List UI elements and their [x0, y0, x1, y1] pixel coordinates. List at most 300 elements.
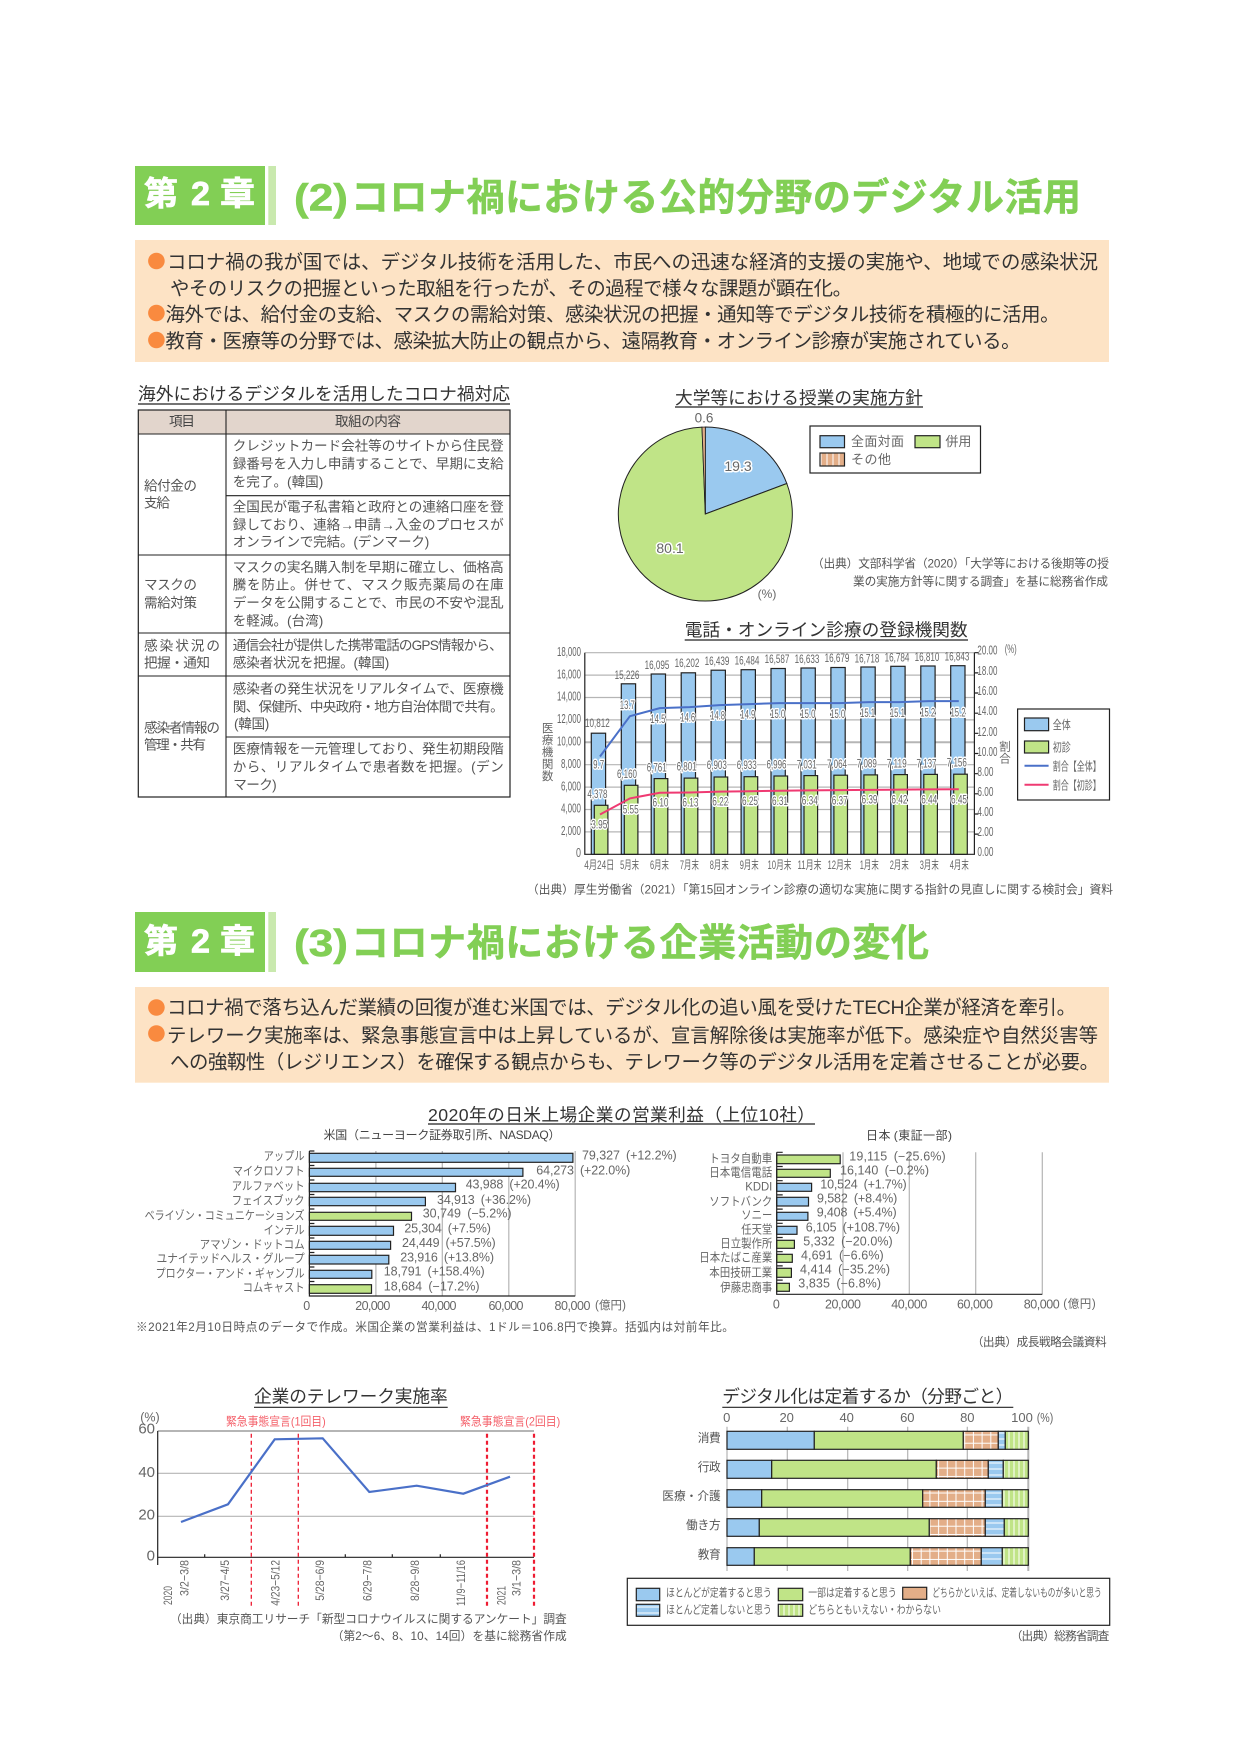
combo chart legend: 割合【初診】 [1053, 778, 1101, 793]
first-visit share labels: 6.31 [772, 794, 788, 808]
row: administration [698, 1460, 1028, 1478]
first-visit value labels [587, 756, 967, 801]
bar chart: Japan companies: 日本 (東証一部) [866, 1129, 952, 1143]
stacked chart axis labels: 0 [723, 1410, 730, 1425]
left axis labels: 14,000 [557, 688, 581, 704]
first-visit share labels: 6.37 [832, 793, 848, 807]
table: overseas digital responses: 関、保健所、中央政府・地方自治体間で共有。 [233, 700, 504, 714]
stacked chart legend: ほとんど定着しないと思う [666, 1603, 772, 1617]
telework x labels: 3/27−4/5 [218, 1560, 232, 1601]
month labels: 12月末 [828, 858, 852, 872]
table: overseas digital responses: マスクの [144, 578, 197, 592]
section header: (2) public sector digital use: (2) [294, 178, 348, 220]
stacked chart legend: 一部は定着すると思う [808, 1585, 897, 1599]
US value labels: 34,913 (+36.2%) [437, 1193, 531, 1207]
table: overseas digital responses: 録番号を入力し申請することで、早期に支給 [233, 456, 504, 472]
Japan value labels: 4,691 (−6.6%) [801, 1249, 884, 1263]
US grid and axes [376, 1151, 575, 1296]
US axis labels: 80,000 [554, 1299, 591, 1313]
Japan company names: トヨタ自動車 [709, 1151, 772, 1165]
total share labels: 15.1 [890, 706, 905, 720]
US value labels [384, 1149, 677, 1294]
month labels: 2月末 [890, 858, 909, 872]
left axis labels: 16,000 [557, 666, 581, 682]
pie chart: class policy: 80.1 [656, 540, 684, 556]
bar chart: Japan companies [699, 1129, 1096, 1311]
US value labels: 24,449 (+57.5%) [402, 1236, 496, 1250]
table title: 海外におけるデジタルを活用したコロナ禍対応 [138, 384, 510, 404]
left axis labels: 4,000 [561, 800, 581, 816]
Japan company names: ソフトバンク [709, 1194, 772, 1208]
Japan company names: ソニー [741, 1208, 772, 1222]
total value labels: 16,633 [795, 652, 820, 666]
first-visit value labels: 7,137 [916, 756, 937, 770]
stacked chart axis labels: 40 [839, 1410, 854, 1425]
Japan axis labels: 80,000 [1024, 1297, 1060, 1311]
summary panel: public sector: 教育・医療等の分野では、感染拡大防止の観点から、遠隔教育・オンライン診療が実施されている。 [166, 331, 1020, 353]
month labels: 10月末 [768, 858, 792, 872]
telework x labels: 3/2−3/8 [177, 1560, 191, 1596]
Japan axis labels: 0 [773, 1297, 780, 1311]
first-visit value labels: 7,156 [947, 756, 967, 770]
US company names: コムキャスト [243, 1281, 305, 1295]
total value labels: 16,679 [825, 651, 850, 665]
pie chart: class policy [618, 410, 792, 601]
section header: (2) public sector digital use: 第 [144, 175, 178, 212]
total value labels: 16,784 [885, 651, 910, 665]
combo chart source note: （出典）厚生労働省（2021）「第15回オンライン診療の適切な実施に関する指針の見直しに関する検討会」資料 [527, 882, 1113, 896]
table: overseas digital responses: 取組の内容 [335, 413, 401, 429]
first-visit value labels: 7,064 [827, 757, 847, 771]
Japan bars [777, 1155, 840, 1291]
total bars [591, 666, 965, 854]
left axis labels: 2,000 [561, 823, 581, 838]
right axis labels: 16.00 [977, 683, 997, 698]
table: overseas digital responses: を完了。(韓国) [233, 474, 323, 490]
US value labels: 25,304 (+7.5%) [404, 1222, 491, 1236]
summary panel: public sector: 海外では、給付金の支給、マスクの需給対策、感染状況の把握・通知等でデジタル技術を積極的に活用。 [166, 304, 1060, 326]
Japan value labels: 10,524 (+1.7%) [820, 1177, 907, 1191]
US company names [145, 1149, 305, 1295]
US company names: ユナイテッドヘルス・グループ [157, 1251, 305, 1265]
month labels [584, 858, 969, 872]
grid and axes [585, 653, 978, 854]
pie chart: class policy: 19.3 [724, 458, 752, 474]
table: overseas digital responses: 感染状況の [144, 638, 220, 654]
telework x labels [161, 1560, 524, 1606]
Japan company names: 任天堂 [741, 1222, 772, 1236]
row: consumption [698, 1431, 1028, 1449]
first-visit share labels: 6.42 [891, 793, 908, 807]
total value labels: 16,810 [915, 650, 940, 664]
first-visit share labels [591, 793, 967, 831]
total value labels: 16,587 [765, 652, 790, 666]
emergency declaration 2 [460, 1414, 560, 1606]
combo chart legend: 全体 [1053, 718, 1071, 732]
stacked bar chart: digital adoption by sector [662, 1410, 1053, 1571]
US company names: インテル [264, 1223, 305, 1237]
pie source note: 業の実施方針等に関する調査」を基に総務省作成 [853, 574, 1108, 588]
left axis labels: 6,000 [561, 778, 581, 794]
first-visit share labels: 5.55 [623, 802, 639, 816]
US value labels: 23,916 (+13.8%) [400, 1251, 494, 1265]
section header: (3) corporate activity: コロナ禍における企業活動の変化 [351, 923, 929, 965]
left axis labels: 8,000 [561, 756, 581, 771]
month labels: 5月末 [620, 858, 639, 872]
row: administration: 行政 [698, 1460, 721, 1474]
total share labels: 14.8 [710, 709, 725, 723]
US value labels: 18,791 (+158.4%) [384, 1265, 485, 1279]
line chart: telework rate [138, 1411, 560, 1606]
telework y labels: 60 [138, 1420, 155, 1438]
Japan value labels: 3,835 (−6.8%) [798, 1277, 881, 1291]
Japan value labels: 16,140 (−0.2%) [840, 1164, 929, 1178]
right axis labels [977, 642, 1017, 859]
pie source note: （出典）文部科学省（2020）「大学等における後期等の授 [812, 556, 1109, 570]
first-visit bars [594, 774, 967, 854]
right axis labels: 10.00 [977, 744, 997, 759]
telework y labels: (%) [140, 1411, 160, 1425]
first-visit share labels: 6.10 [652, 796, 669, 810]
combo chart legend: 割合【全体】 [1053, 760, 1101, 774]
table: overseas digital responses: 支給 [144, 496, 170, 510]
combo chart: registered medical institutions [542, 642, 1017, 872]
stacked chart axis labels: 20 [779, 1410, 794, 1425]
telework x labels: 8/28−9/8 [408, 1560, 422, 1601]
US axis labels: 0 [303, 1299, 310, 1313]
table: overseas digital responses: 感染者状況を把握。(韓国) [233, 654, 389, 670]
table: overseas digital responses: 感染者の発生状況をリアルタイムで、医療機 [233, 680, 504, 696]
month labels: 6月末 [650, 858, 669, 872]
telework x labels: 3/1−3/8 [510, 1560, 524, 1596]
stacked chart legend: どちらともいえない・わからない [808, 1604, 941, 1617]
line chart source note [170, 1612, 567, 1643]
pie chart: class policy: (%) [758, 587, 776, 601]
month labels: 4月末 [950, 858, 969, 872]
total value labels: 15,226 [615, 668, 640, 682]
right axis labels: 14.00 [977, 703, 997, 718]
stacked chart title: デジタル化は定着するか（分野ごと） [722, 1387, 1013, 1407]
first-visit share labels: 6.45 [951, 793, 967, 807]
table: overseas digital responses: 全国民が電子私書箱と政府との連絡口座を登 [233, 500, 504, 514]
telework x labels: 4/23−5/12 [269, 1560, 283, 1606]
emergency declaration 2: 緊急事態宣言(2回目) [460, 1414, 560, 1429]
total share labels: 14.6 [680, 710, 695, 724]
first-visit value labels: 6,160 [617, 767, 637, 781]
stacked chart source note: （出典）総務省調査 [1011, 1629, 1110, 1643]
section header: (3) corporate activity: 2 [191, 922, 210, 960]
left axis labels [542, 644, 581, 860]
month labels: 9月末 [740, 858, 759, 872]
Japan value labels: 4,414 (−35.2%) [800, 1262, 890, 1276]
first-visit value labels: 7,119 [887, 757, 907, 771]
total value labels: 16,202 [675, 656, 700, 670]
telework grid and axes [158, 1431, 534, 1565]
stacked chart legend: ほとんどが定着すると思う [666, 1585, 772, 1599]
total value labels: 16,843 [945, 650, 970, 664]
left axis labels: 機 [542, 746, 554, 759]
Japan company names: 日立製作所 [720, 1236, 772, 1250]
summary panel: corporate: テレワーク実施率は、緊急事態宣言中は上昇しているが、宣言解除後は実施率が低下。感染症や自然災害等 [167, 1025, 1098, 1047]
summary panel: public sector: コロナ禍の我が国では、デジタル技術を活用した、市民への迅速な経済的支援の実施や、地域での感染状況 [167, 252, 1098, 274]
first-visit value labels: 6,933 [737, 758, 757, 772]
total share labels [593, 698, 966, 771]
right axis labels: 2.00 [977, 824, 993, 839]
pie chart: class policy: 0.6 [695, 410, 713, 426]
section header: (3) corporate activity: (3) [294, 923, 348, 965]
Japan company names: 日本たばこ産業 [699, 1251, 772, 1265]
bar charts title: 2020年の日米上場企業の営業利益（上位10社） [428, 1105, 815, 1125]
left axis labels: 療 [542, 733, 554, 747]
US company names: ベライゾン・コミュニケーションズ [145, 1208, 305, 1223]
first-visit share labels: 3.95 [591, 817, 608, 831]
pie legend: その他 [851, 452, 891, 467]
total share labels: 15.1 [860, 706, 875, 720]
Japan value labels: 9,408 (+5.4%) [817, 1205, 897, 1219]
left axis labels: 数 [542, 770, 554, 783]
left axis labels: 0 [576, 845, 581, 860]
total value labels [585, 650, 970, 730]
stacked chart axis labels: 60 [900, 1410, 915, 1425]
total value labels: 10,812 [585, 716, 610, 730]
table: overseas digital responses: 通信会社が提供した携帯電話のGPS情報から、 [233, 638, 503, 653]
line chart title: 企業のテレワーク実施率 [254, 1387, 448, 1407]
section header: (3) corporate activity: 章 [220, 922, 255, 960]
row: work style: 働き方 [686, 1518, 721, 1532]
stacked chart axis labels: (%) [1037, 1410, 1053, 1425]
first-visit share labels: 6.44 [921, 793, 937, 807]
US company names: アマゾン・ドットコム [200, 1237, 305, 1251]
Japan axis labels: (億円) [1063, 1297, 1096, 1310]
pie chart title: 大学等における授業の実施方針 [675, 388, 923, 408]
section header: (2) public sector digital use: コロナ禍における公的分野のデジタル活用 [351, 176, 1081, 220]
US axis labels: (億円) [595, 1299, 626, 1312]
combo chart legend [1018, 709, 1110, 800]
section header: (3) corporate activity [135, 912, 929, 972]
US bars [309, 1153, 573, 1293]
combo chart legend: 初診 [1053, 740, 1071, 755]
Japan company names: KDDI [745, 1180, 772, 1194]
first-visit value labels: 4,378 [587, 787, 608, 801]
emergency declaration 1 [226, 1414, 326, 1606]
first-visit value labels: 6,801 [677, 760, 697, 774]
left axis labels: 医 [542, 723, 553, 735]
US axis labels: 20,000 [355, 1299, 390, 1313]
month labels: 11月末 [798, 858, 822, 872]
summary panel: corporate: への強靱性（レジリエンス）を確保する観点からも、テレワーク等のデジタル活用を定着させることが必要。 [170, 1052, 1099, 1074]
US axis labels: 60,000 [488, 1299, 524, 1313]
telework x labels: 5/28−6/9 [313, 1560, 327, 1601]
table: overseas digital responses: オンラインで完結。(デンマーク) [233, 534, 429, 550]
row: work style [686, 1518, 1028, 1536]
Japan company names: 本田技研工業 [709, 1266, 772, 1280]
total share labels: 15.0 [830, 707, 845, 721]
total value labels: 16,718 [855, 652, 880, 666]
line chart source note: （第2〜6、8、10、14回）を基に総務省作成 [332, 1629, 567, 1643]
right axis labels: 18.00 [977, 663, 997, 678]
Japan axis labels: 60,000 [957, 1297, 993, 1311]
table: overseas digital responses: マスクの実名購入制を早期に確立し、価格高 [233, 559, 504, 575]
Japan value labels: 19,115 (−25.6%) [849, 1150, 946, 1164]
first-visit value labels: 6,996 [766, 757, 787, 771]
table: overseas digital responses: 騰を防止。併せて、マスク販売薬局の在庫 [233, 576, 504, 592]
row: consumption: 消費 [698, 1431, 721, 1445]
total share labels: 14.5 [650, 712, 666, 726]
stacked chart legend [627, 1578, 1110, 1625]
right axis labels: 4.00 [977, 804, 993, 819]
total share labels: 15.0 [800, 707, 816, 721]
first-visit value labels: 7,031 [797, 757, 817, 771]
table: overseas digital responses: (韓国) [234, 716, 269, 732]
table: overseas digital responses: 医療情報を一元管理しており、発生初期段階 [233, 742, 504, 756]
Japan grid and axes [843, 1152, 1042, 1294]
table: overseas digital responses: マーク) [233, 778, 277, 792]
right axis labels: 8.00 [977, 764, 993, 779]
right axis labels: 合 [999, 752, 1011, 766]
first-visit share labels: 6.39 [862, 793, 878, 807]
section header: (2) public sector digital use: 章 [220, 175, 255, 212]
telework line [181, 1438, 510, 1522]
US value labels: 30,749 (−5.2%) [423, 1206, 512, 1220]
stacked chart legend: どちらかといえば、定着しないものが多いと思う [932, 1585, 1102, 1599]
right axis labels: 0.00 [977, 844, 993, 859]
section header: (2) public sector digital use: 2 [191, 175, 210, 212]
left axis labels: 関 [542, 758, 553, 771]
summary panel: public sector: やそのリスクの把握といった取組を行ったが、その過程で様々な課題が顕在化。 [170, 278, 852, 300]
month labels: 4月24日 [584, 858, 614, 872]
month labels: 3月末 [920, 858, 939, 872]
section header: (3) corporate activity: 第 [144, 922, 178, 960]
first-visit share labels: 6.25 [742, 794, 758, 808]
table: overseas digital responses: 給付金の [144, 478, 197, 494]
Japan company names: 日本電信電話 [709, 1166, 772, 1180]
bar chart: US companies: 米国（ニューヨーク証券取引所、NASDAQ） [324, 1127, 560, 1142]
table: overseas digital responses: 感染者情報の [144, 720, 220, 736]
summary panel: public sector [135, 240, 1109, 362]
total value labels: 16,439 [705, 654, 730, 668]
Japan value labels: 6,105 (+108.7%) [806, 1221, 900, 1235]
total value labels: 16,484 [735, 654, 760, 668]
table: overseas digital responses: 録しており、連絡→申請→入金のプロセスが [233, 518, 504, 532]
telework y labels: 40 [138, 1464, 155, 1481]
bar chart footnote: ※2021年2月10日時点のデータで作成。米国企業の営業利益は、1ドル＝106.8円で換算。括弧内は対前年比。 [136, 1320, 734, 1334]
share line: first visit [600, 789, 959, 814]
first-visit value labels: 6,761 [647, 761, 667, 775]
US axis labels: 40,000 [422, 1299, 457, 1313]
telework y labels: 20 [138, 1506, 155, 1524]
row: medical and care [662, 1489, 1028, 1507]
Japan value labels: 5,332 (−20.0%) [803, 1235, 893, 1249]
line chart source note: （出典）東京商工リサーチ「新型コロナウイルスに関するアンケート」調査 [170, 1612, 567, 1626]
right axis labels: (%) [1005, 644, 1017, 656]
combo chart title: 電話・オンライン診療の登録機関数 [685, 620, 968, 640]
first-visit share labels: 6.13 [682, 796, 699, 810]
total share labels: 13.7 [620, 698, 635, 712]
row: medical and care: 医療・介護 [662, 1489, 721, 1503]
Japan value labels [798, 1150, 946, 1291]
Japan company names: 伊藤忠商事 [720, 1280, 772, 1294]
US company names: アルファベット [232, 1179, 305, 1193]
row: education [698, 1548, 1028, 1565]
Japan company names [699, 1151, 772, 1294]
pie legend [810, 426, 980, 473]
total share labels: 9.7 [593, 757, 604, 771]
US company names: マイクロソフト [233, 1164, 305, 1178]
right axis labels: 6.00 [977, 784, 993, 799]
total share labels: 14.9 [740, 708, 756, 722]
pie legend: 全面対面 [851, 434, 904, 449]
right axis labels: 12.00 [977, 724, 997, 739]
telework x labels: 2020 [161, 1586, 175, 1605]
bar chart source note: （出典）成長戦略会議資料 [972, 1335, 1107, 1349]
US axis labels [303, 1299, 626, 1313]
left axis labels: 12,000 [557, 711, 581, 726]
total value labels: 16,095 [645, 658, 670, 672]
table: overseas digital responses: から、リアルタイムで患者数を把握。(デン [233, 758, 504, 774]
telework y labels [138, 1411, 160, 1564]
month labels: 7月末 [680, 858, 699, 872]
telework x labels: 2021 [495, 1586, 509, 1605]
section header: (2) public sector digital use [135, 166, 1081, 225]
US company names: アップル [264, 1149, 305, 1163]
stacked chart axis labels: 100 [1011, 1410, 1033, 1425]
US company names: フェイスブック [232, 1193, 305, 1208]
left axis labels: 10,000 [557, 734, 581, 748]
US value labels: 64,273 (+22.0%) [536, 1163, 630, 1177]
share line: total [600, 701, 959, 756]
month labels: 8月末 [710, 858, 729, 872]
stacked chart axis labels: 80 [960, 1410, 975, 1425]
telework y labels: 0 [147, 1548, 155, 1564]
Japan value labels: 9,582 (+8.4%) [817, 1192, 897, 1206]
telework x labels: 6/29−7/8 [360, 1560, 374, 1601]
stacked chart grid [727, 1427, 1028, 1571]
first-visit share labels: 6.22 [712, 795, 729, 809]
US value labels: 43,988 (+20.4%) [466, 1177, 560, 1191]
month labels: 1月末 [860, 858, 879, 872]
bar chart: US companies [145, 1127, 677, 1313]
right axis labels: 20.00 [977, 642, 997, 658]
emergency declaration 1: 緊急事態宣言(1回目) [226, 1414, 326, 1429]
table: overseas digital responses: データを公開することで、市民の不安や混乱 [233, 594, 504, 610]
Japan axis labels: 40,000 [891, 1297, 927, 1311]
Japan axis labels: 20,000 [825, 1297, 861, 1311]
table: overseas digital responses: 管理・共有 [144, 738, 206, 752]
table: overseas digital responses [138, 410, 510, 797]
total share labels: 15.2 [920, 705, 935, 719]
summary panel: corporate: コロナ禍で落ち込んだ業績の回復が進む米国では、デジタル化の追い風を受けたTECH企業が経済を牽引。 [167, 997, 1076, 1019]
US value labels: 79,327 (+12.2%) [582, 1149, 677, 1163]
pie legend: 併用 [945, 434, 971, 449]
first-visit value labels: 6,903 [707, 758, 727, 772]
left axis labels: 18,000 [557, 644, 581, 659]
row: education: 教育 [698, 1548, 721, 1562]
telework x labels: 11/9−11/16 [454, 1560, 468, 1606]
right axis labels: 割 [999, 740, 1011, 754]
Japan axis labels [773, 1297, 1096, 1311]
total share labels: 15.0 [770, 707, 785, 721]
table: overseas digital responses: 把握・通知 [144, 654, 210, 670]
total share labels: 15.2 [950, 705, 966, 719]
first-visit share labels: 6.34 [802, 793, 818, 807]
table: overseas digital responses: 需給対策 [144, 594, 197, 610]
first-visit value labels: 7,089 [857, 757, 877, 771]
table: overseas digital responses: 項目 [169, 414, 195, 429]
pie source note [812, 556, 1109, 588]
table: overseas digital responses: クレジットカード会社等のサイトから住民登 [233, 438, 504, 454]
US value labels: 18,684 (−17.2%) [384, 1280, 480, 1294]
table: overseas digital responses: を軽減。(台湾) [233, 612, 323, 628]
